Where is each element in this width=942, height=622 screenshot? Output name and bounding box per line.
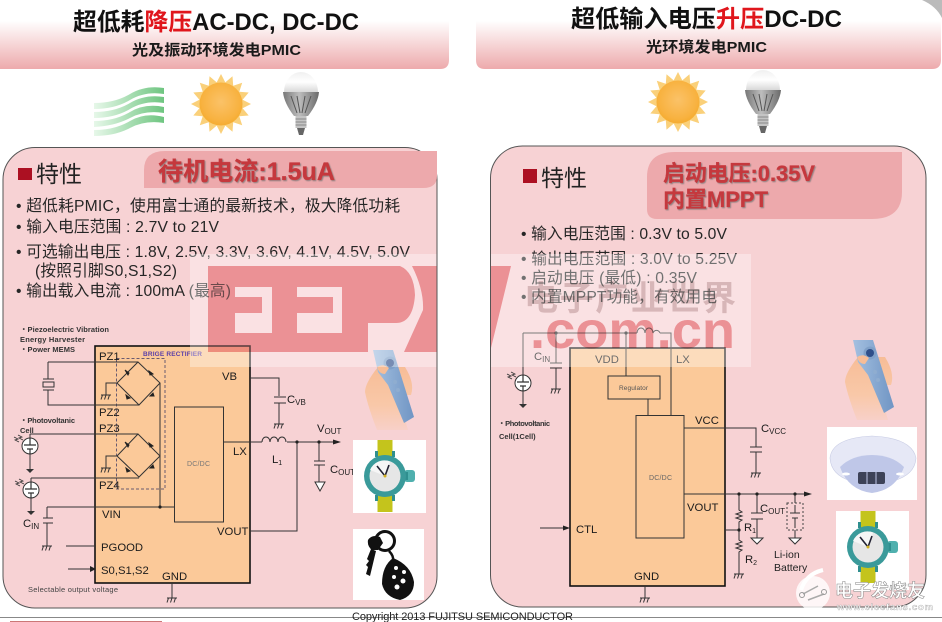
icon: vibration waves xyxy=(94,87,164,136)
callout: startup voltage xyxy=(647,152,902,219)
circuit: step-down PMIC: L xyxy=(272,454,278,466)
circuit: step-down PMIC: GND xyxy=(162,571,187,583)
circuit: step-up PMIC: OUT xyxy=(768,507,785,516)
text block: left feature list: (按照引脚S0,S1,S2) xyxy=(35,262,177,280)
circuit: step-up PMIC: C xyxy=(760,503,768,515)
circuit: step-up PMIC: Cell(1Cell) xyxy=(499,432,536,441)
callout: startup voltage: 启动电压:0.35V xyxy=(663,161,815,186)
circuit: step-down PMIC: IN xyxy=(31,522,39,531)
circuit: step-down PMIC: S0,S1,S2 xyxy=(101,565,149,577)
circuit: step-down PMIC: C xyxy=(330,464,338,476)
circuit: step-up PMIC: C xyxy=(534,351,542,363)
watermark: elecfans xyxy=(796,570,933,613)
watermark: elecfans: www.elecfans.com xyxy=(836,602,933,613)
text block: left feature list: • 可选输出电压 : 1.8V, 2.5V, 3.3V, 3.6V, 4.1V, 4.5V, 5.0V xyxy=(16,243,411,261)
circuit: step-down PMIC: LX xyxy=(233,446,247,458)
circuit: step-down PMIC: Energy Harvester xyxy=(20,335,85,344)
circuit: step-down PMIC: PZ1 xyxy=(99,351,120,363)
circuit: step-down PMIC: PZ2 xyxy=(99,407,120,419)
icon: watch right xyxy=(836,511,909,590)
circuit: step-up PMIC: VOUT xyxy=(687,502,718,514)
header: step-up converter xyxy=(476,0,941,69)
circuit: step-down PMIC: OUT xyxy=(338,468,355,477)
circuit: step-up PMIC: 1 xyxy=(752,528,756,535)
watermark: EEPW: 电子产业世界 xyxy=(524,280,736,318)
circuit: step-down PMIC: Cell xyxy=(20,426,34,435)
circuit: step-down PMIC: ・Piezoelectric Vibration xyxy=(20,325,109,334)
circuit: step-down PMIC: C xyxy=(287,394,295,406)
callout: standby current xyxy=(144,151,437,188)
text block: right feature list: • 输出电压范围 : 3.0V to 5.25V xyxy=(521,250,738,268)
subtitle: step-down: 光及振动环境发电PMIC xyxy=(132,41,301,59)
circuit: step-up PMIC: Regulator xyxy=(619,385,649,392)
text block: right feature list: • 输入电压范围 : 0.3V to 5.0V xyxy=(521,225,728,243)
circuit: step-down PMIC: Selectable output voltage xyxy=(28,585,118,594)
title: step-down: 超低耗降压AC-DC, DC-DC xyxy=(73,9,359,36)
logo letters: EEPW xyxy=(208,266,415,352)
text block: left feature list: • 超低耗PMIC，使用富士通的最新技术，极大降低功耗 xyxy=(16,197,400,215)
heading: features left: 特性 xyxy=(36,161,82,187)
circuit: step-up PMIC: VDD xyxy=(595,354,619,366)
circuit: step-up PMIC: DC/DC xyxy=(649,475,672,482)
watermark: EEPW: .com.cn xyxy=(530,302,735,360)
circuit: step-up PMIC: Li-ion xyxy=(774,549,800,561)
watermark: EEPW xyxy=(190,254,751,367)
circuit: step-up PMIC xyxy=(498,328,812,602)
callout: standby current: 待机电流:1.5uA xyxy=(158,158,335,186)
circuit: step-down PMIC: VB xyxy=(222,371,237,383)
text block: right feature list: • 启动电压 (最低) : 0.35V xyxy=(521,269,698,287)
circuit: step-down PMIC: PGOOD xyxy=(101,542,143,554)
header: step-down converter xyxy=(0,0,449,69)
icon: LED bulb right xyxy=(745,70,781,133)
circuit: step-down PMIC: VOUT xyxy=(217,526,248,538)
circuit: step-down PMIC: BRIGE RECTIFIER xyxy=(143,351,202,358)
icon: hand with remote right xyxy=(845,340,894,420)
circuit: step-up PMIC: GND xyxy=(634,571,659,583)
icon: car key fob xyxy=(353,529,424,600)
text block: left feature list: • 输出载入电流 : 100mA (最高) xyxy=(16,282,231,300)
icon: sun right xyxy=(648,72,708,132)
circuit: step-up PMIC: CTL xyxy=(576,524,597,536)
circuit: step-up PMIC: R xyxy=(744,522,752,534)
circuit: step-down PMIC: PZ3 xyxy=(99,423,120,435)
circuit: step-down PMIC: C xyxy=(23,518,31,530)
circuit: step-down PMIC: DC/DC xyxy=(187,461,210,468)
circuit: step-up PMIC: ・Photovoltanic xyxy=(498,419,550,428)
circuit: step-up PMIC: IN xyxy=(542,355,550,364)
circuit: step-down PMIC: PZ4 xyxy=(99,480,120,492)
text block: right feature list: • 内置MPPT功能，有效用电 xyxy=(521,288,717,306)
text block: left feature list xyxy=(16,197,411,300)
text block: right feature list xyxy=(521,225,738,306)
watermark: elecfans: 电子发烧友 xyxy=(835,580,925,601)
circuit: step-down PMIC: V xyxy=(317,423,325,435)
panel: step-up features xyxy=(490,146,926,607)
circuit: step-up PMIC: 2 xyxy=(753,560,757,567)
icon: sun left xyxy=(191,74,251,134)
icon: smoke detector xyxy=(827,427,917,500)
circuit: step-down PMIC xyxy=(14,325,355,602)
circuit: step-down PMIC: VIN xyxy=(102,509,121,521)
circuit: step-up PMIC: R xyxy=(745,554,753,566)
subtitle: step-up: 光环境发电PMIC xyxy=(646,38,767,56)
circuit: step-down PMIC: VB xyxy=(295,398,306,407)
circuit: step-down PMIC: ・Power MEMS xyxy=(20,345,75,354)
circuit: step-up PMIC: C xyxy=(761,423,769,435)
callout: startup voltage: 内置MPPT xyxy=(663,187,769,212)
icon: LED bulb left xyxy=(283,72,319,135)
icon: watch left xyxy=(353,440,426,513)
panel: step-down features xyxy=(3,148,437,608)
circuit: step-down PMIC: OUT xyxy=(325,427,342,436)
circuit: step-up PMIC: Battery xyxy=(774,562,808,574)
title: step-up: 超低输入电压升压DC-DC xyxy=(571,6,842,33)
circuit: step-down PMIC: 1 xyxy=(278,460,282,467)
heading: features right: 特性 xyxy=(541,165,587,191)
circuit: step-up PMIC: LX xyxy=(676,354,690,366)
circuit: step-down PMIC: ・Photovoltanic xyxy=(20,416,75,425)
icon: hand with remote left xyxy=(365,350,414,430)
circuit: step-up PMIC: VCC xyxy=(695,415,719,427)
circuit: step-up PMIC: VCC xyxy=(769,427,786,436)
text block: left feature list: • 输入电压范围 : 2.7V to 21V xyxy=(16,218,220,236)
